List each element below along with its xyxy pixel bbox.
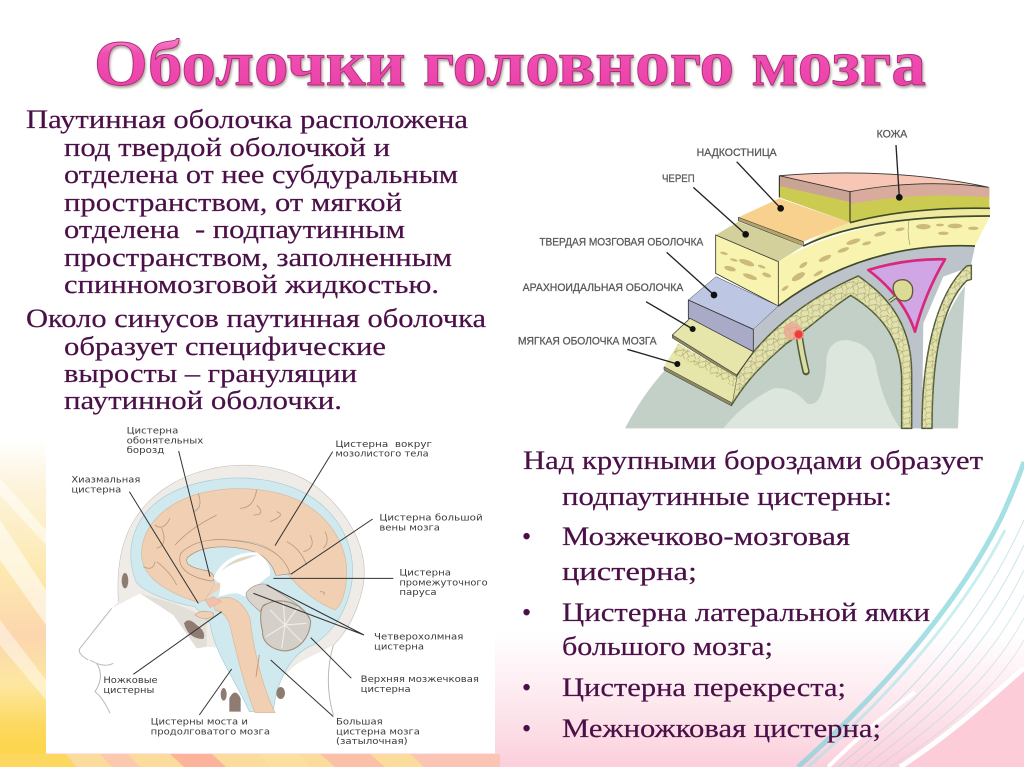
text block: subarachnoid cisterns list: Над крупными бороздами образует: [523, 446, 983, 475]
leader lines: [129, 451, 393, 717]
text block: subarachnoid cisterns list: Мозжечково-мозговая: [562, 522, 850, 551]
text block: arachnoid description: отделена от нее субдуральным: [64, 160, 458, 189]
text block: arachnoid description: Паутинная оболочка расположена: [26, 105, 469, 134]
cistern labels: Ножковые: [103, 676, 158, 686]
cistern labels: Верхняя мозжечковая: [361, 675, 479, 685]
skull bone: [112, 465, 364, 675]
cistern labels: Цистерна: [127, 427, 178, 437]
text block: subarachnoid cisterns list: цистерна;: [562, 557, 697, 586]
text block: arachnoid description: паутинной оболочки.: [64, 386, 342, 415]
cistern labels: продолговатого мозга: [151, 727, 270, 737]
cistern labels: Цистерны моста и: [151, 718, 248, 728]
text block: arachnoid description: [26, 105, 487, 415]
text block: subarachnoid cisterns list: Межножковая цистерна;: [562, 714, 881, 743]
text block: subarachnoid cisterns list: [522, 446, 983, 743]
cistern labels: Цистерна большой: [379, 513, 483, 523]
text block: subarachnoid cisterns list: подпаутинные цистерны:: [562, 482, 892, 511]
venous sinus: [868, 259, 945, 332]
periosteum: [738, 198, 850, 242]
cistern labels: Хиазмальная: [71, 476, 140, 486]
text block: arachnoid description: под твердой оболочкой и: [64, 133, 390, 162]
cerebellum: [261, 601, 311, 651]
text block: subarachnoid cisterns list: •: [522, 522, 531, 551]
cistern labels: паруса: [399, 588, 437, 598]
wave lines: [905, 670, 1024, 767]
dura block: [688, 277, 778, 329]
cerebrum: [142, 489, 347, 610]
cerebrospinal fluid: [131, 478, 353, 712]
cistern labels: (затылочная): [336, 737, 408, 747]
ventricle white space: [213, 552, 270, 597]
cistern labels: мозолистого тела: [335, 450, 429, 460]
text block: arachnoid description: Около синусов паутинная оболочка: [26, 304, 487, 333]
midbrain tectum and vermis strip: [246, 584, 310, 618]
sulcus: [799, 337, 806, 372]
title: Оболочки головного мозга: [94, 28, 926, 100]
skull block: [716, 222, 803, 262]
labels and leader lines: НАДКОСТНИЦА: [697, 147, 777, 159]
subarachnoid grey space: [737, 246, 975, 428]
arachnoid block: [672, 318, 753, 375]
cistern labels: цистерна: [374, 642, 424, 652]
text block: subarachnoid cisterns list: •: [522, 598, 531, 627]
labels and leader lines: ЧЕРЕП: [662, 173, 695, 185]
skin: [850, 184, 989, 223]
labels and leader lines: ТВЕРДАЯ МОЗГОВАЯ ОБОЛОЧКА: [539, 236, 704, 248]
text block: subarachnoid cisterns list: Цистерна перекреста;: [562, 673, 846, 702]
text block: arachnoid description: образует специфические: [64, 332, 386, 361]
cistern labels: Цистерна вокруг: [335, 440, 432, 450]
cistern labels: цистерна: [361, 685, 411, 695]
text block: subarachnoid cisterns list: большого мозга;: [562, 632, 773, 661]
cistern labels: Четверохолмная: [374, 633, 463, 643]
brainstem: [214, 597, 275, 713]
brain tissue: [625, 283, 913, 428]
cistern labels: Цистерна: [399, 569, 451, 579]
labels and leader lines: [518, 129, 908, 367]
cistern labels: вены мозга: [379, 523, 440, 533]
text block: subarachnoid cisterns list: •: [522, 673, 531, 702]
corpus callosum: [180, 540, 290, 581]
cistern labels: Большая: [336, 718, 383, 728]
pia block: [664, 343, 737, 405]
diagram: layers of the meninges: [518, 129, 990, 428]
cistern labels: промежуточного: [399, 578, 488, 588]
text block: arachnoid description: пространством, заполненным: [64, 243, 452, 272]
text block: arachnoid description: выросты – грануляции: [64, 359, 357, 388]
cistern labels: цистерны: [103, 686, 154, 696]
cistern labels: цистерна: [71, 485, 121, 495]
cistern labels: обонятельных: [127, 437, 204, 447]
text block: arachnoid description: пространством, от мягкой: [64, 188, 402, 217]
diagram: brain cisterns sagittal section: [46, 420, 495, 753]
skull arc: [778, 216, 990, 306]
labels and leader lines: МЯГКАЯ ОБОЛОЧКА МОЗГА: [518, 336, 657, 348]
text block: subarachnoid cisterns list: Цистерна латеральной ямки: [562, 598, 930, 627]
background: [0, 451, 1024, 767]
labels and leader lines: АРАХНОИДАЛЬНАЯ ОБОЛОЧКА: [523, 282, 684, 294]
labels and leader lines: КОЖА: [877, 129, 908, 141]
icon: red vessel: [784, 322, 803, 340]
text block: arachnoid description: спинномозговой жидкостью.: [64, 270, 439, 299]
arachnoid and pia band: [732, 265, 971, 428]
cistern labels: [71, 427, 488, 747]
head outline: [79, 465, 364, 715]
text block: arachnoid description: отделена - подпаутинным: [64, 215, 405, 244]
cistern labels: цистерна мозга: [336, 727, 420, 737]
arachnoid granulation: [889, 280, 913, 301]
bone and vessel shadows: [122, 573, 285, 712]
cistern labels: борозд: [127, 446, 164, 456]
text block: subarachnoid cisterns list: •: [522, 714, 531, 743]
